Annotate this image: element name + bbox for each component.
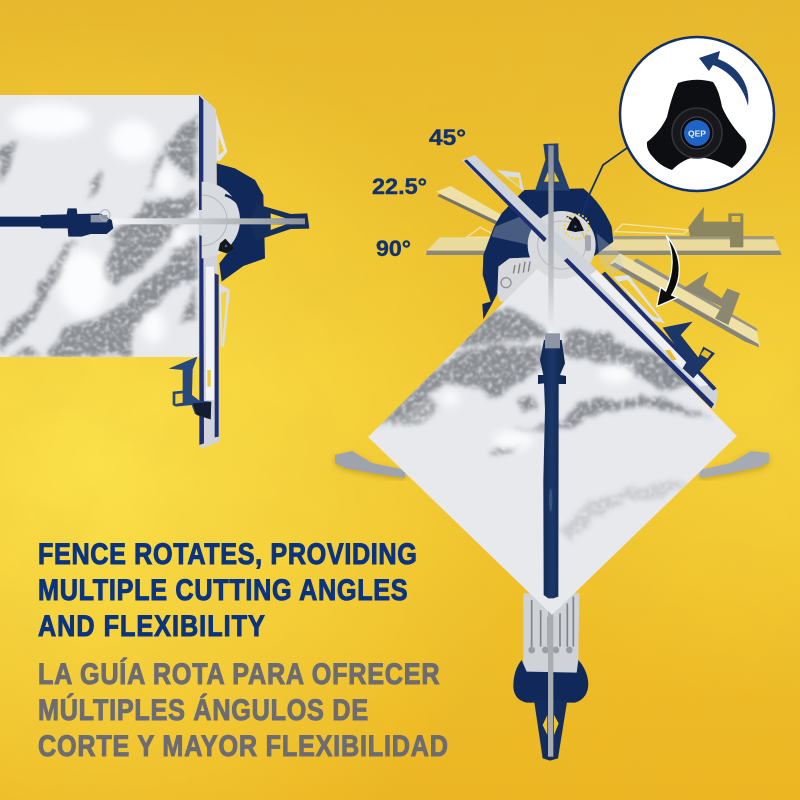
icon: curved rotation arrow: [699, 51, 748, 106]
ghost fence 90: [425, 207, 782, 255]
silver plate on housing: [497, 257, 547, 302]
scoring handle over tile: [538, 333, 566, 598]
angle labels: [372, 125, 466, 261]
heading: English: AND FLEXIBILITY: [38, 609, 265, 642]
navy housing: [482, 188, 613, 319]
base rail: [523, 593, 583, 675]
small locking knob: [567, 216, 584, 232]
tool head: navy housing: [217, 163, 265, 282]
heading: English: FENCE ROTATES, PROVIDING: [38, 537, 417, 570]
translucent ghost plates on housing: [492, 217, 623, 275]
right view: base rail and rear foot: [513, 593, 588, 761]
fence body: [462, 155, 718, 409]
ghost fences: 90 and 22.5 degrees: [425, 143, 782, 347]
ghost fence 22.5: [436, 186, 760, 347]
rotary disc: [202, 182, 245, 258]
stop bracket: [663, 322, 715, 378]
tile: marble, straight: [0, 95, 199, 357]
fence navy strips: [464, 159, 717, 408]
heading: Spanish: [38, 657, 448, 762]
locking knob: [218, 239, 234, 253]
active fence at 45 degrees, hub and blade: [462, 145, 718, 409]
heading: Spanish: MÚLTIPLES ÁNGULOS DE: [38, 693, 368, 726]
rotary disc: [528, 211, 596, 279]
base navy block: [513, 660, 588, 703]
black rotation arrow: [657, 235, 679, 307]
label: 22.5 degrees: 22.5°: [372, 174, 427, 199]
leader line from knob to callout: [582, 148, 627, 215]
heading: English: MULTIPLE CUTTING ANGLES: [38, 573, 408, 606]
tile: marble, rotated 45 degrees: [368, 256, 737, 615]
left view: cutter with tile square to the fence: [0, 93, 309, 449]
stop bracket: [169, 357, 211, 419]
fence fins: [497, 170, 665, 323]
heading: English: [38, 537, 417, 642]
side wings: [335, 451, 769, 478]
fence, straight: [199, 93, 219, 449]
blade: [548, 145, 554, 339]
icon: three-lobed knob: QEP: [688, 128, 706, 138]
icon: three-lobed knob: [647, 80, 746, 170]
rear blade: [548, 597, 553, 757]
label: 90 degrees: 90°: [376, 236, 411, 261]
callout: knob close-up: [620, 37, 774, 191]
label: 45 degrees: 45°: [429, 125, 466, 150]
fence fins: [216, 113, 230, 347]
heading: Spanish: CORTE Y MAYOR FLEXIBILIDAD: [38, 729, 448, 762]
rear foot: [534, 700, 567, 761]
dashed highlight around knob: [564, 214, 589, 239]
blade: [113, 218, 305, 224]
scoring handle: [0, 208, 113, 237]
tower: [535, 143, 570, 191]
fence navy scale strips: [199, 95, 219, 445]
heading: Spanish: LA GUÍA ROTA PARA OFRECER: [38, 657, 440, 690]
tool head: rear arm: [250, 204, 309, 241]
